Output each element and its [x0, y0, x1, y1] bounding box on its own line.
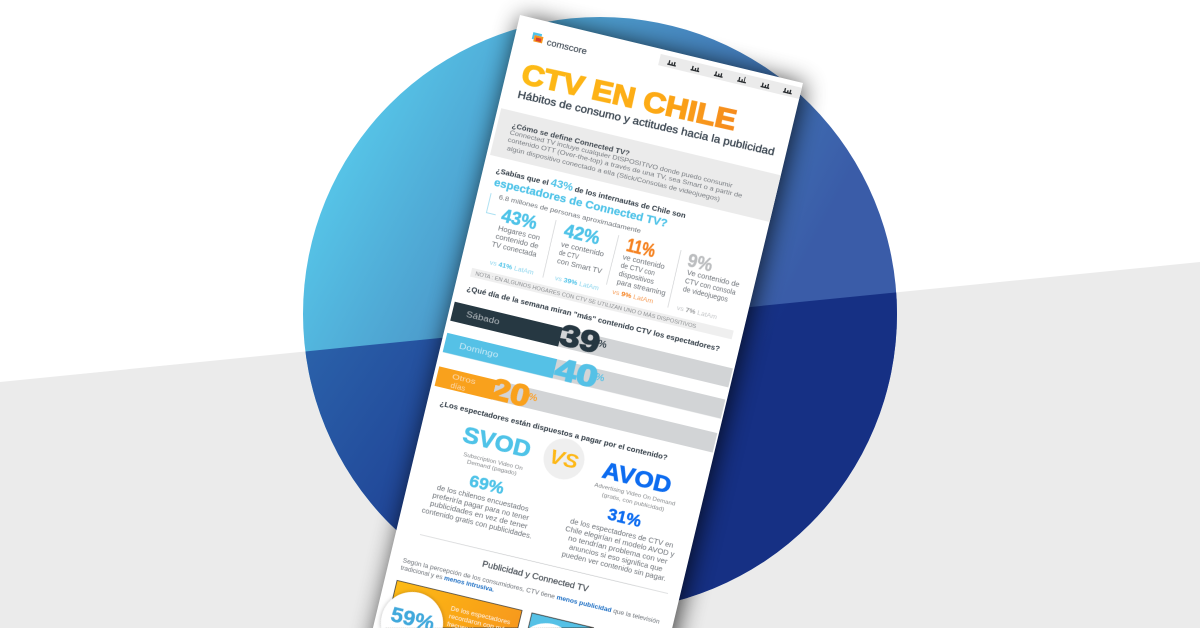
- stat: streaming devices 11%: de CTV con: [620, 263, 656, 278]
- subtitle: Hábitos de consumo y actitudes hacia la publicidad: [516, 89, 776, 158]
- stat: game consoles 9%: [676, 250, 745, 325]
- cyan headline: espectadores de Connected TV?: [493, 177, 669, 230]
- arrow: connector: [486, 193, 500, 215]
- question: day of week: ¿Qué día de la semana miran "más" contenido CTV los espectadores?: [466, 284, 721, 353]
- bar: Otros días: [433, 360, 719, 458]
- stat: game consoles 9%: vs 7% LatAm: [676, 305, 718, 321]
- stat: streaming devices 11%: para streaming: [616, 279, 666, 298]
- stat: game consoles 9%: 9%: [686, 250, 715, 276]
- bar: Otros días: %: [527, 392, 539, 405]
- stat: households 43%: TV conectada: [491, 241, 537, 259]
- panel: SVOD: preferiría pagar para no tener: [432, 492, 530, 523]
- panel: AVOD: pueden ver contenido sin pagar.: [561, 551, 667, 583]
- stat: game consoles 9%: de videojuegos: [682, 286, 729, 304]
- panel: SVOD: contenido gratis con publicidades.: [421, 507, 532, 541]
- bar: Otros días: 20: [488, 373, 533, 414]
- stat: streaming devices 11%: 11%: [624, 235, 657, 261]
- panel: gold 59% card: [379, 579, 522, 628]
- sheet contents: [377, 21, 802, 628]
- bar: Domingo: 40: [552, 353, 601, 395]
- stat: Smart TV 42%: vs 39% LatAm: [554, 275, 600, 292]
- bar: Domingo: Domingo: [458, 342, 500, 360]
- panel: AVOD: [558, 451, 693, 584]
- population note: 6.8 millones de personas aproximadamente: [498, 194, 642, 235]
- stat: Smart TV 42%: con Smart TV: [556, 258, 603, 276]
- icon: comscore logo: [531, 32, 544, 43]
- panel: AVOD: Chile elegirían el modelo AVOD y: [564, 526, 675, 559]
- panel: definition: [490, 108, 781, 222]
- stat: households 43%: Hogares con: [497, 225, 541, 242]
- definition text: algún dispositivo conectado a ella (Stick/Consolas de videojuegos): [506, 145, 721, 203]
- infographic sheet: [373, 15, 803, 628]
- advertising intro text: tradicional y es menos intrusiva.: [400, 565, 495, 594]
- stat: Smart TV 42%: ve contenido: [560, 242, 605, 259]
- bar: Otros días: días: [450, 381, 467, 393]
- panel: AVOD: 31%: [606, 504, 643, 531]
- panel: AVOD: AVOD: [600, 457, 674, 498]
- stat: game consoles 9%: CTV con consola: [684, 278, 736, 297]
- icon: VS badge: [539, 434, 589, 484]
- question: connected TV viewers: [489, 164, 688, 245]
- panel: AVOD: no tendrían problema con ver: [567, 535, 669, 566]
- stat: game consoles 9%: Ve contenido de: [686, 270, 740, 289]
- title: CTV EN CHILE: [519, 59, 739, 137]
- stat: streaming devices 11%: dispositivos: [618, 271, 655, 286]
- panel: SVOD: publicidades en vez de tener: [429, 501, 529, 531]
- panel: SVOD: Demand (pagado): [466, 460, 517, 477]
- panel: AVOD: Advertising Video On Demand: [594, 482, 676, 508]
- panel: AVOD: anuncios si eso significa que: [568, 544, 663, 573]
- panel: SVOD: 69%: [468, 471, 506, 498]
- panel: AVOD: de los espectadores de CTV en: [569, 518, 674, 550]
- panel: SVOD: Subscription Video On: [463, 452, 523, 472]
- stat: Smart TV 42%: de CTV: [558, 250, 580, 261]
- logo wordmark: comscore: [546, 37, 588, 56]
- definition text: Connected TV incluye cualquier DISPOSITIVO donde puedo consumir: [509, 129, 734, 190]
- bar: Sábado: [449, 293, 735, 392]
- panel: SVOD: SVOD: [460, 421, 534, 463]
- definition text: contenido OTT (Over-the-top) a través de una TV, sea Smart o a partir de: [507, 137, 743, 200]
- blue circle: [303, 17, 897, 611]
- bar: Domingo: [441, 326, 727, 425]
- stat: households 43%: [487, 205, 547, 277]
- definition heading: ¿Cómo se define Connected TV?: [511, 121, 631, 158]
- bar: Sábado: 39: [557, 319, 603, 360]
- panel: SVOD: [421, 416, 554, 541]
- brand strip: [658, 54, 802, 99]
- bar: Sábado: Sábado: [465, 310, 501, 327]
- stat: households 43%: contenido de: [495, 234, 539, 251]
- bar chart: viewing by day: [433, 293, 735, 458]
- icon: VS badge: VS: [547, 446, 581, 474]
- section heading: advertising: Publicidad y Connected TV: [481, 559, 590, 594]
- bar: Sábado: %: [597, 338, 608, 351]
- panel: SVOD: de los chilenos encuestados: [436, 485, 530, 513]
- panel: AVOD: (gratis, con publicidad): [601, 492, 665, 513]
- panel: gold 59% card: De los espectadores: [450, 605, 511, 626]
- stat: households 43%: vs 41% LatAm: [489, 259, 534, 277]
- stat: streaming devices 11%: [612, 234, 677, 308]
- bar: Domingo: %: [594, 372, 606, 385]
- question: willingness to pay: ¿Los espectadores están dispuestos a pagar por el contenido?: [439, 399, 669, 462]
- stat: streaming devices 11%: ve contenido: [622, 254, 665, 271]
- question: connected TV viewers: ¿Sabías que el 43% de los internautas de Chile son: [495, 164, 688, 221]
- note bar: NOTA : EN ALGUNOS HOGARES CON CTV SE UTILIZAN UNO O MÁS DISPOSITIVOS: [475, 270, 697, 330]
- panel: cyan card: [528, 613, 594, 628]
- stat: Smart TV 42%: [552, 221, 612, 292]
- definition text: [505, 129, 745, 208]
- stat: households 43%: 43%: [499, 206, 539, 233]
- bar: Otros días: Otros: [451, 372, 477, 386]
- stat: Smart TV 42%: 42%: [562, 221, 602, 248]
- advertising intro text: Según la percepción de los consumidores, CTV tiene menos publicidad que la televisión: [402, 557, 661, 626]
- note bar: [470, 268, 734, 339]
- stat: streaming devices 11%: vs 9% LatAm: [612, 289, 654, 305]
